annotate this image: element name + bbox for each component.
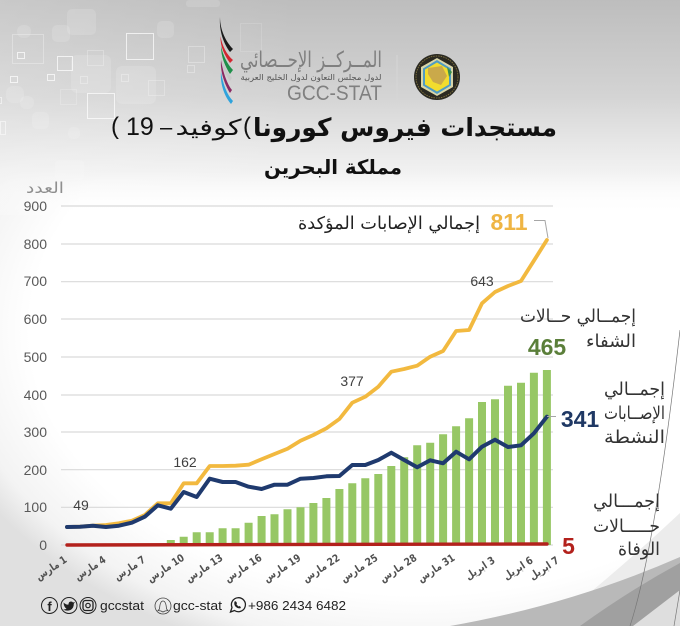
handle: gcc-stat: gcc-stat [173,598,222,613]
callout: recoveries 465 [520,306,636,360]
callout: deaths 5: حـــــالات [593,516,660,537]
callout: confirmed 811: إجمالي الإصابات المؤكدة [298,214,480,234]
y axis labels: 500 [24,349,47,365]
icon: snapchat [155,598,171,614]
x axis labels: 25 مارس [338,552,380,585]
callout: active 341: النشطة [604,427,665,448]
x axis labels: 6 ابريل [501,554,535,583]
y axis labels: 400 [24,387,47,403]
title: ( [111,113,119,140]
x axis labels: 10 مارس [145,552,187,585]
y axis labels: 900 [24,198,47,214]
x axis labels: 19 مارس [261,552,303,585]
bottom right swoosh [450,330,680,626]
x axis labels: 7 مارس [112,554,148,583]
logo subtitle: لدول مجلس التعاون لدول الخليج العربية [240,73,382,82]
logo swoosh [220,17,233,104]
icon: instagram [80,598,96,614]
x axis labels: 13 مارس [183,552,225,585]
title: مستجدات فيروس كورونا [253,113,557,143]
data labels: 162 [173,454,197,470]
y axis title: العدد [26,179,64,197]
x axis labels: 4 مارس [72,554,108,583]
x axis labels: 7 ابريل [527,554,561,583]
icon: facebook: f [47,599,52,614]
title [111,113,557,143]
x axis labels: 28 مارس [377,552,419,585]
callout: active 341: 341 [561,406,599,432]
logo: GCC-STAT [220,17,397,105]
logo GCC-STAT text: GCC-STAT [287,82,382,105]
x axis labels: 31 مارس [415,552,457,585]
callout: confirmed 811: 811 [490,209,528,235]
y axis labels: 200 [24,462,47,478]
y axis labels: 800 [24,236,47,252]
handle: gccstat: gccstat [100,598,144,613]
bars: total recoveries [171,370,547,545]
title: كوفيد [176,116,242,141]
title: – [160,114,173,140]
x axis labels: 22 مارس [300,552,342,585]
line: total confirmed cases [67,240,547,527]
callout: active 341: إجمــالي [604,379,665,400]
data labels: 49 [73,497,89,513]
y axis labels: 700 [24,273,47,289]
y axis labels [24,198,47,553]
y axis labels: 0 [39,537,47,553]
y axis labels: 100 [24,499,47,515]
logo Arabic name: المــركــز الإحــصائي [240,48,382,73]
icon: twitter [61,598,77,614]
callout: active 341: الإصــابات [604,403,665,424]
callout: recoveries 465: 465 [528,334,566,360]
icon: facebook [42,598,58,614]
icon: whatsapp [230,598,245,612]
data labels [73,273,494,513]
callout: deaths 5: إجمـــالي [593,491,660,512]
phone number: +986 2434 6482 [248,598,346,613]
x axis labels: 16 مارس [222,552,264,585]
y axis labels: 300 [24,424,47,440]
title: ( [243,113,251,140]
callout: deaths 5: 5 [562,533,575,559]
title: 19 [126,113,154,141]
callout: recoveries 465: إجمــالي حــالات [520,306,636,327]
chart [24,198,561,585]
x axis labels: 3 ابريل [463,554,497,583]
line: total active cases [67,417,547,527]
data labels: 377 [340,373,364,389]
x axis labels [33,552,561,585]
callout: confirmed 811 [298,209,548,238]
line: total deaths [67,544,547,545]
footer: social contacts [42,598,346,614]
callout: deaths 5: الوفاة [618,539,660,560]
x axis labels: 1 مارس [33,554,69,583]
callout: active 341 [547,379,665,448]
callout: recoveries 465: الشفاء [586,331,636,352]
icon: GCC emblem [414,54,460,100]
data labels: 643 [470,273,494,289]
y axis labels: 600 [24,311,47,327]
subtitle: Kingdom of Bahrain: مملكة البحرين [264,155,402,179]
callout: deaths 5 [562,491,660,560]
